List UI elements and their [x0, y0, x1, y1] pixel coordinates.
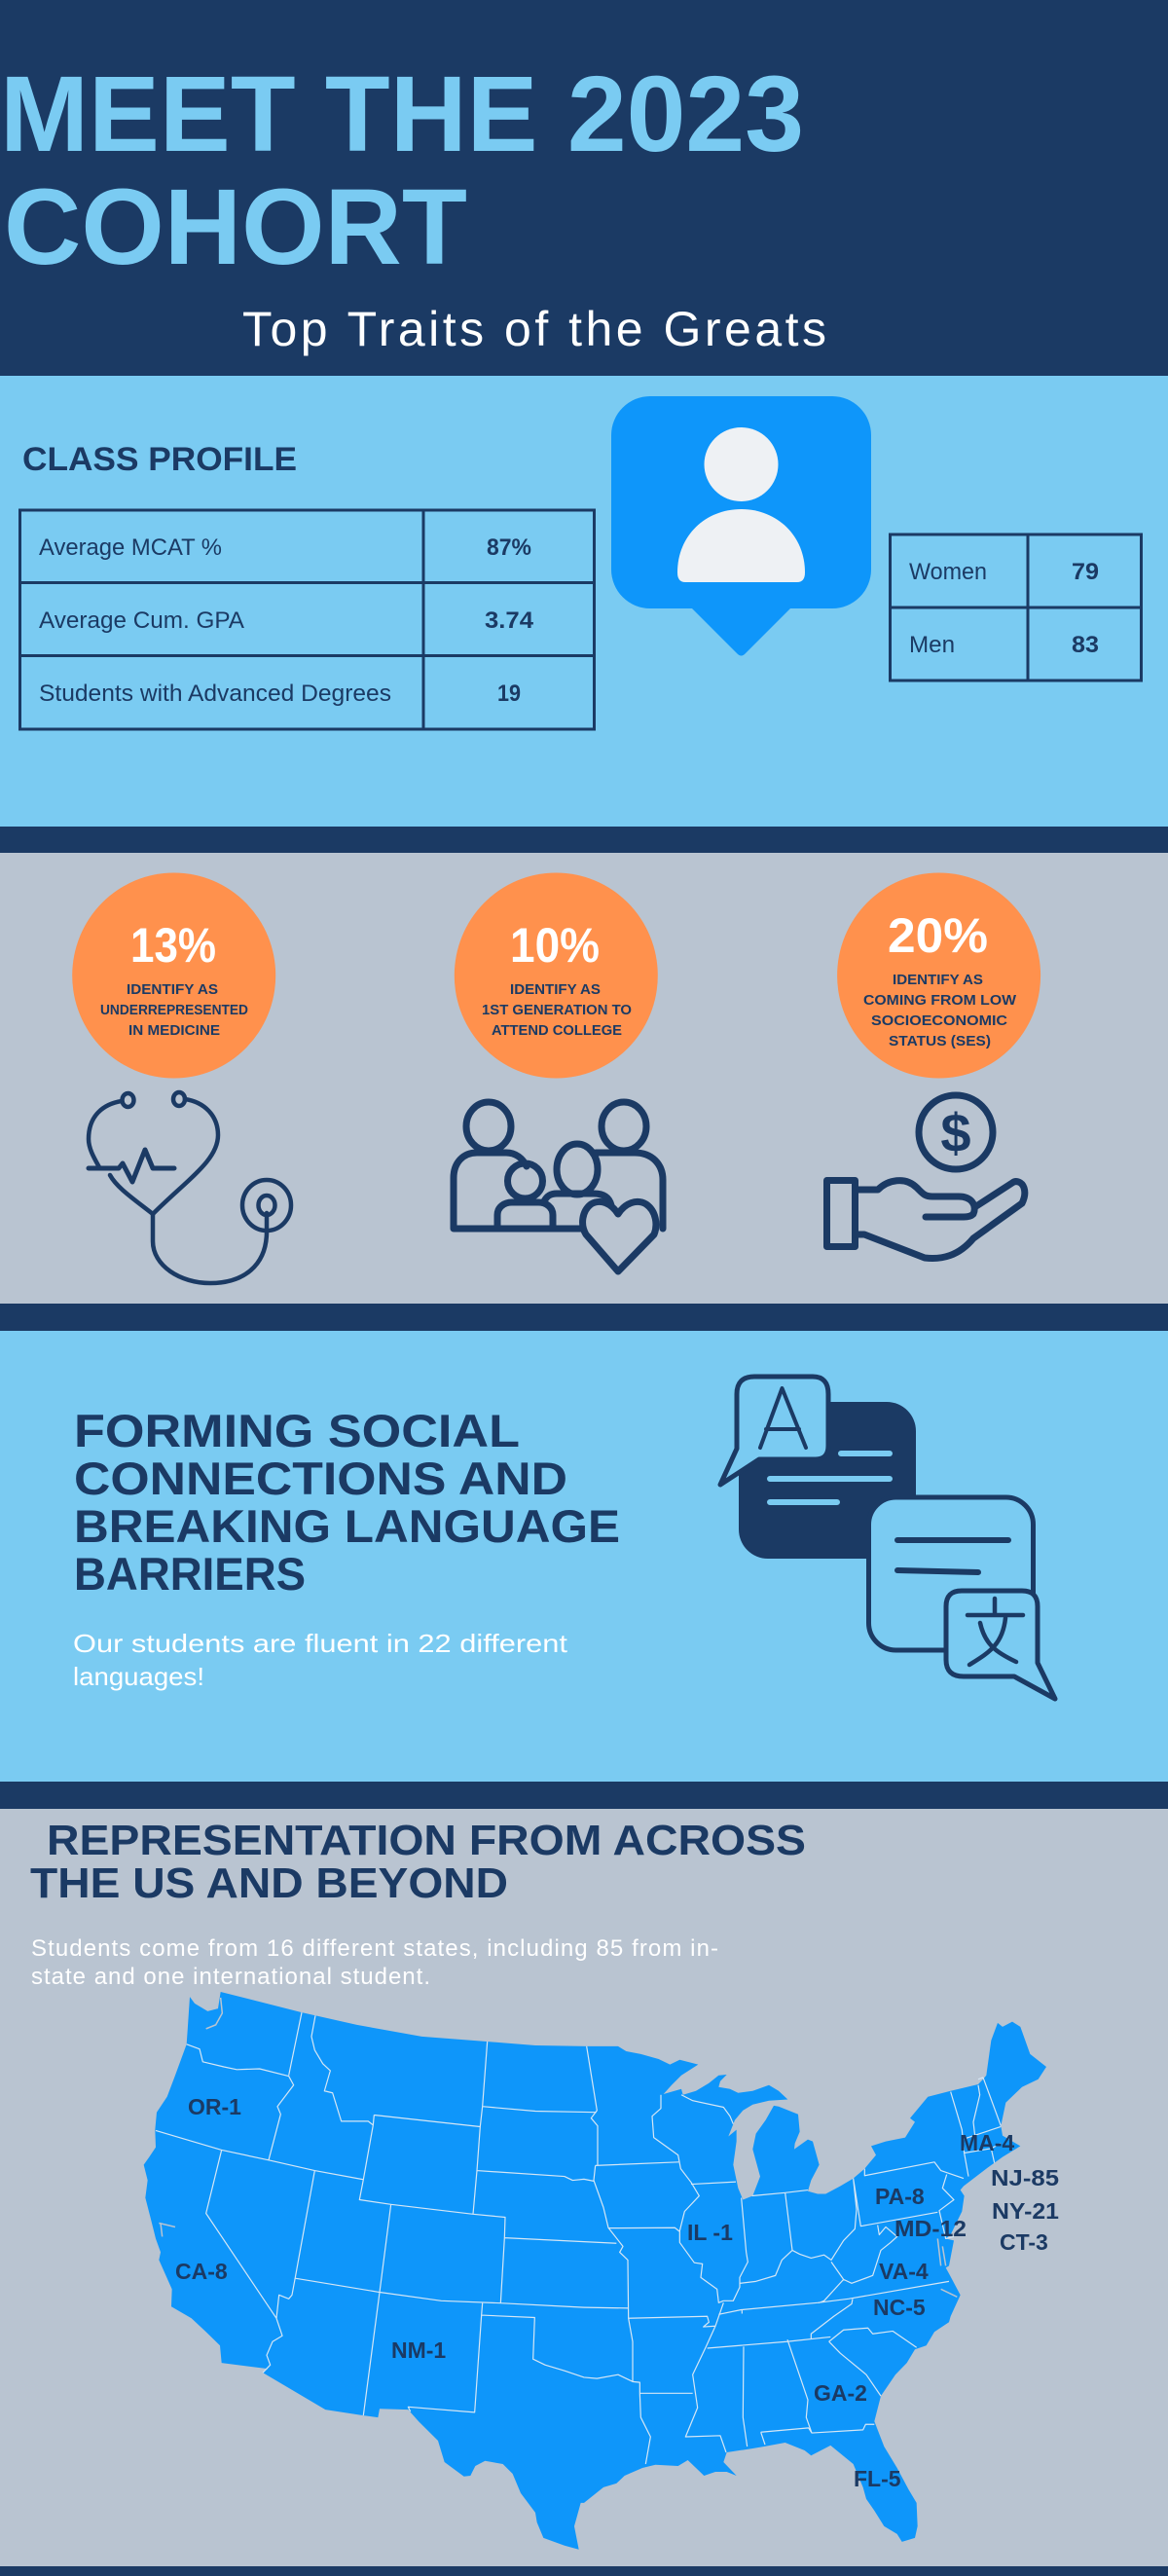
stat: 13 percent: 13% — [130, 918, 216, 973]
heading: social connections: BARRIERS — [74, 1548, 306, 1600]
stat: 10 percent: 10% — [510, 918, 600, 973]
heading: social connections: BREAKING LANGUAGE — [74, 1500, 620, 1552]
stat: 20 percent: 20% — [888, 908, 988, 963]
table: gender — [890, 534, 1142, 681]
stat: 20 percent: SOCIOECONOMIC — [871, 1013, 1008, 1029]
table: class statistics: Average MCAT % — [39, 534, 222, 561]
title — [0, 55, 804, 287]
title: COHORT — [4, 167, 467, 287]
subtitle: Top Traits of the Greats — [242, 302, 826, 356]
map labels: student counts by state: MD-12 — [894, 2216, 967, 2241]
map labels: student counts by state: MA-4 — [960, 2130, 1014, 2155]
icon: hand holding coin — [827, 1095, 1025, 1258]
table: class statistics: 87% — [487, 534, 531, 561]
panel: class profile — [0, 376, 1168, 827]
map labels: student counts by state: CA-8 — [175, 2259, 228, 2284]
map labels: student counts by state: NC-5 — [873, 2295, 926, 2320]
panel: languages — [0, 1331, 1168, 1782]
stat: 10 percent: ATTEND COLLEGE — [492, 1023, 622, 1039]
text block: languages: languages! — [73, 1662, 204, 1691]
table: gender: 83 — [1072, 632, 1099, 658]
heading: social connections: FORMING SOCIAL — [74, 1405, 520, 1456]
text block: representation — [31, 1935, 718, 1990]
table: gender: Men — [909, 632, 955, 658]
map labels: student counts by state: CT-3 — [1000, 2229, 1048, 2255]
panel: header — [0, 0, 1168, 376]
stat: 20 percent — [837, 872, 1040, 1079]
table: gender: Women — [909, 559, 987, 585]
icon: stethoscope — [89, 1092, 291, 1283]
stat: 13 percent: UNDERREPRESENTED — [100, 1003, 248, 1018]
stat: 20 percent: IDENTIFY AS — [893, 973, 983, 988]
map labels: student counts by state: IL -1 — [687, 2220, 733, 2245]
heading: social connections: CONNECTIONS AND — [74, 1453, 567, 1504]
stat: 13 percent: IDENTIFY AS — [127, 982, 218, 998]
table: class statistics: Average Cum. GPA — [39, 607, 244, 634]
table: class statistics: 19 — [497, 681, 521, 707]
text block: representation: state and one international student. — [31, 1964, 430, 1990]
panel: identity statistics — [0, 853, 1168, 1304]
map labels: student counts by state: NY-21 — [992, 2198, 1059, 2224]
table: class statistics: Students with Advanced Degrees — [39, 681, 391, 707]
text block: representation: Students come from 16 different states, including 85 from in- — [31, 1935, 718, 1962]
icon: translation speech bubbles — [720, 1377, 1055, 1699]
stat: 20 percent: STATUS (SES) — [889, 1034, 991, 1049]
table: class statistics: 3.74 — [485, 607, 534, 634]
map labels: student counts by state: PA-8 — [875, 2184, 925, 2209]
stat: 10 percent: IDENTIFY AS — [510, 982, 601, 998]
icon: hand holding coin: $ — [940, 1102, 971, 1163]
map labels: student counts by state: NJ-85 — [991, 2165, 1059, 2190]
map: United States — [144, 1992, 1059, 2550]
map labels: student counts by state: GA-2 — [814, 2380, 867, 2406]
stat: 10 percent: 1ST GENERATION TO — [482, 1003, 632, 1018]
heading: class profile: CLASS PROFILE — [22, 441, 297, 478]
table: gender: 79 — [1072, 559, 1099, 585]
map labels: student counts by state: FL-5 — [854, 2466, 901, 2491]
panel: representation — [0, 1809, 1168, 2566]
stat: 13 percent — [72, 872, 275, 1079]
stat: 13 percent: IN MEDICINE — [128, 1023, 220, 1039]
text block: languages — [73, 1629, 568, 1691]
text block: languages: Our students are fluent in 22 different — [73, 1629, 568, 1658]
icon: person pin — [611, 396, 871, 656]
heading: social connections — [74, 1405, 620, 1600]
stat: 20 percent: COMING FROM LOW — [863, 993, 1016, 1009]
title: MEET THE 2023 — [0, 55, 804, 174]
map labels: student counts by state: VA-4 — [879, 2259, 929, 2284]
map labels: student counts by state: OR-1 — [188, 2094, 241, 2119]
map labels: student counts by state: NM-1 — [391, 2337, 446, 2363]
icon: family with heart — [454, 1102, 663, 1271]
table: class statistics — [19, 510, 595, 729]
heading: representation: THE US AND BEYOND — [30, 1859, 508, 1907]
map labels: student counts by state — [175, 2094, 1059, 2491]
heading: representation: REPRESENTATION FROM ACROSS — [47, 1817, 806, 1864]
heading: representation — [30, 1817, 806, 1907]
stat: 10 percent — [455, 872, 658, 1079]
